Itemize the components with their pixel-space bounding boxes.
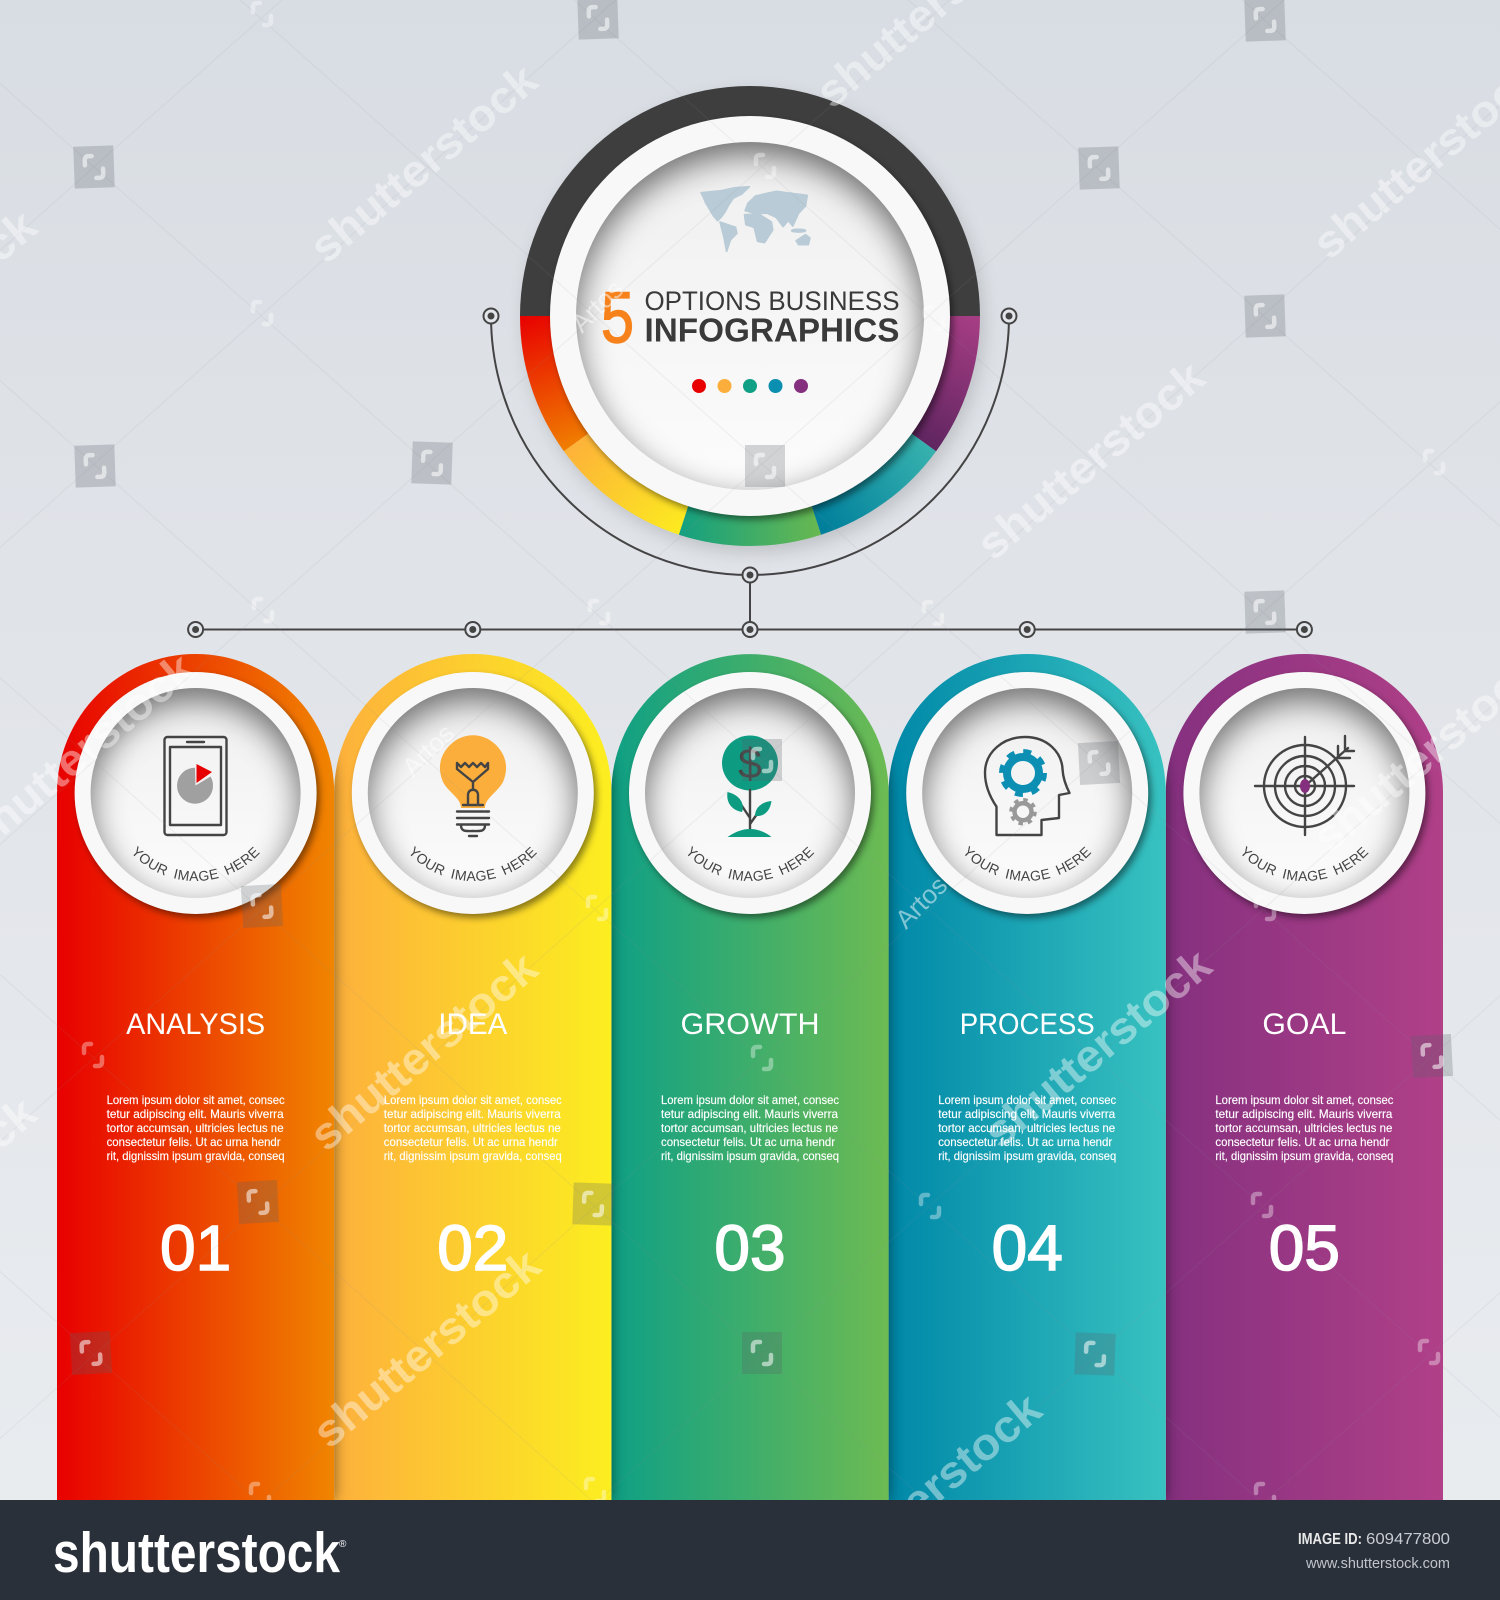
number: 04 [992, 1212, 1063, 1284]
icon: world map [701, 187, 810, 251]
watermark overlay: shutterstock [300, 53, 548, 273]
watermark overlay: Artos [565, 274, 629, 338]
body text [661, 1094, 839, 1163]
number: 02 [437, 1212, 508, 1284]
number: 01 [160, 1212, 231, 1284]
panel: 04 process [888, 654, 1166, 1500]
curved caption: YOUR IMAGE HERE [134, 846, 260, 881]
watermark overlay: shutterstock [804, 1382, 1052, 1600]
icon: target [1255, 736, 1354, 835]
body text [384, 1094, 562, 1163]
curved caption: YOUR IMAGE HERE [1242, 846, 1369, 881]
body text: Lorem ipsum dolor sit amet, consec [384, 1094, 562, 1107]
registered mark: ® [339, 1539, 347, 1550]
body text: tetur adipiscing elit. Mauris viverra [938, 1108, 1116, 1121]
icon: light bulb [440, 735, 506, 836]
icon: money plant [722, 736, 778, 837]
body text: tetur adipiscing elit. Mauris viverra [384, 1108, 561, 1121]
body text [1215, 1094, 1394, 1163]
connector arc and tree [188, 308, 1312, 637]
body text: rit, dignissim ipsum gravida, conseq [938, 1150, 1116, 1163]
body text: Lorem ipsum dolor sit amet, consec [938, 1094, 1116, 1107]
curved caption: YOUR IMAGE HERE [410, 846, 537, 881]
footer bar [0, 1500, 1500, 1600]
panel: 03 growth [611, 654, 889, 1500]
title: big 5: 5 [601, 278, 634, 358]
curved caption: YOUR IMAGE HERE [688, 846, 814, 881]
watermark overlay: shutterstock [303, 1238, 551, 1458]
body text: tetur adipiscing elit. Mauris viverra [107, 1108, 284, 1121]
heading: IDEA [438, 1008, 507, 1041]
body text: consectetur felis. Ut ac urna hendr [938, 1136, 1112, 1149]
title: options business: OPTIONS BUSINESS [644, 286, 900, 316]
body text: consectetur felis. Ut ac urna hendr [661, 1136, 835, 1149]
footer wordmark: shutterstock [53, 1521, 340, 1585]
title: infographics: INFOGRAPHICS [644, 312, 900, 348]
panel: 05 goal [1166, 654, 1443, 1500]
site url: www.shutterstock.com [1305, 1555, 1450, 1572]
number: 03 [714, 1212, 786, 1284]
body text: rit, dignissim ipsum gravida, conseq [661, 1150, 839, 1163]
watermark overlay: Artos [396, 718, 460, 782]
body text: consectetur felis. Ut ac urna hendr [107, 1136, 281, 1149]
body text: tortor accumsan, ultricies lectus ne [384, 1122, 561, 1135]
body text [938, 1094, 1116, 1163]
heading: GOAL [1262, 1008, 1346, 1041]
colour dots [692, 379, 808, 393]
watermark overlay: shutterstock [974, 938, 1222, 1158]
body text: tetur adipiscing elit. Mauris viverra [661, 1108, 839, 1121]
body text: consectetur felis. Ut ac urna hendr [384, 1136, 558, 1149]
body text: tortor accumsan, ultricies lectus ne [107, 1122, 284, 1135]
watermark overlay: shutterstock [967, 350, 1215, 570]
body text: Lorem ipsum dolor sit amet, consec [661, 1094, 839, 1107]
watermark overlay: shutterstock [300, 941, 548, 1161]
body text: tortor accumsan, ultricies lectus ne [1215, 1122, 1392, 1135]
body text: rit, dignissim ipsum gravida, conseq [384, 1150, 562, 1163]
body text: Lorem ipsum dolor sit amet, consec [107, 1094, 285, 1107]
icon: tablet with pie chart [164, 737, 226, 835]
curved caption: YOUR IMAGE HERE [965, 846, 1092, 881]
body text: tetur adipiscing elit. Mauris viverra [1215, 1108, 1393, 1121]
heading: GROWTH [680, 1008, 820, 1041]
number: 05 [1269, 1212, 1340, 1284]
image number: 609477800 [1366, 1531, 1450, 1548]
panel: 01 analysis [57, 654, 334, 1500]
segmented ring [520, 86, 980, 546]
body text: Lorem ipsum dolor sit amet, consec [1215, 1094, 1394, 1107]
heading: PROCESS [960, 1008, 1095, 1041]
body text: tortor accumsan, ultricies lectus ne [661, 1122, 838, 1135]
watermark overlay: Artos [889, 870, 953, 934]
icon: head with gears [985, 737, 1070, 835]
body text: tortor accumsan, ultricies lectus ne [938, 1122, 1115, 1135]
central disc [550, 116, 950, 516]
panel: 02 idea [334, 654, 612, 1500]
body text: consectetur felis. Ut ac urna hendr [1215, 1136, 1390, 1149]
body text: rit, dignissim ipsum gravida, conseq [1215, 1150, 1393, 1163]
body text [107, 1094, 285, 1163]
heading: ANALYSIS [126, 1008, 265, 1041]
icon: money plant: $ [738, 740, 762, 788]
body text: rit, dignissim ipsum gravida, conseq [107, 1150, 285, 1163]
image id: IMAGE ID: [1298, 1531, 1362, 1548]
